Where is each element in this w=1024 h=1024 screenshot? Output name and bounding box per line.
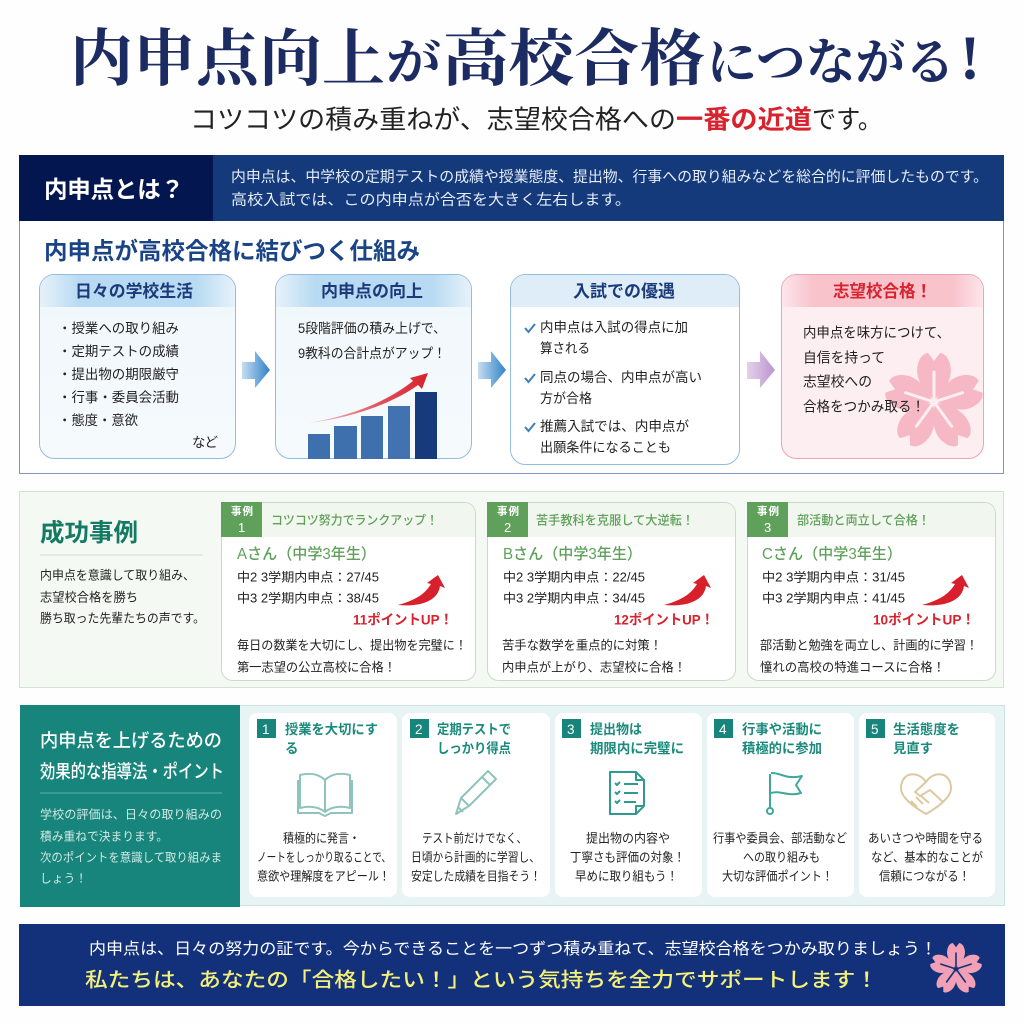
header label block: 内申点とは？ bbox=[44, 176, 184, 202]
point 1 bbox=[249, 713, 397, 897]
card: entrance exam advantage: 同点の場合、内申点が高い bbox=[540, 369, 702, 385]
point 1: 1 bbox=[262, 722, 270, 737]
icon: checklist document bbox=[610, 772, 644, 814]
case 2: Bさん（中学3年生） bbox=[503, 545, 642, 563]
point 5: あいさつや時間を守る bbox=[868, 832, 983, 846]
case 1: 中3 2学期内申点：38/45 bbox=[237, 590, 379, 606]
card: passing the target school: 自信を持って bbox=[803, 350, 885, 366]
case 2: 事例 bbox=[497, 504, 519, 518]
point 3: 丁寧さも評価の対象！ bbox=[570, 850, 685, 864]
closing banner: 私たちは、あなたの「合格したい！」という気持ちを全力でサポートします！ bbox=[85, 968, 878, 992]
point 2: 安定した成績を目指そう！ bbox=[411, 870, 541, 884]
title: につながる bbox=[707, 22, 955, 94]
icon: book bbox=[298, 774, 352, 816]
card: entrance exam advantage: 算される bbox=[540, 341, 590, 356]
icon: cherry blossom bbox=[929, 943, 983, 995]
case 1: 第一志望の公立高校に合格！ bbox=[237, 660, 396, 674]
card: passing the target school: 内申点を味方につけて、 bbox=[803, 324, 950, 342]
card: naishinten improvement: 5段階評価の積み上げで、 bbox=[298, 321, 446, 336]
case 3: 中2 3学期内申点：31/45 bbox=[762, 570, 905, 584]
section heading: 内申点が高校合格に結びつく仕組み bbox=[44, 237, 420, 264]
case 1 bbox=[221, 502, 476, 680]
card: entrance exam advantage bbox=[510, 274, 740, 464]
left teal intro: 積み重ねで決まります。 bbox=[40, 828, 168, 844]
case 1: コツコツ努力でランクアップ！ bbox=[271, 514, 438, 528]
card: passing the target school bbox=[782, 274, 986, 458]
card: daily school life: 日々の学校生活 bbox=[75, 281, 193, 301]
card: entrance exam advantage: 内申点は入試の得点に加 bbox=[540, 319, 688, 335]
definition text bbox=[231, 168, 988, 208]
point 3: 提出物は bbox=[590, 721, 642, 737]
arrow bbox=[478, 351, 506, 388]
point 1: る bbox=[285, 741, 298, 756]
case 1: 11ポイントUP！ bbox=[353, 612, 453, 628]
header label block bbox=[19, 155, 213, 221]
arrow bbox=[242, 351, 270, 388]
card: daily school life: ・態度・意欲 bbox=[58, 413, 139, 428]
case 1: 事例 bbox=[231, 504, 253, 518]
subtitle: コツコツの積み重ねが、志望校合格への bbox=[190, 104, 676, 134]
title: 内申点向上 bbox=[70, 9, 385, 98]
closing banner bbox=[19, 924, 1005, 1006]
card: passing the target school: 志望校への bbox=[803, 374, 872, 390]
case 2: 苦手教科を克服して大逆転！ bbox=[536, 512, 694, 528]
point 4: 行事や委員会、部活動など bbox=[713, 832, 847, 846]
title: ! bbox=[960, 24, 980, 92]
panel: effective points bbox=[20, 705, 1004, 907]
case 3: 事例 bbox=[757, 504, 779, 518]
left teal intro: 学校の評価は、日々の取り組みの bbox=[40, 806, 222, 822]
point 2: しっかり得点 bbox=[437, 741, 511, 756]
case 1: 毎日の数業を大切にし、提出物を完璧に！ bbox=[237, 638, 467, 652]
left teal intro: しょう！ bbox=[40, 872, 87, 886]
header band bbox=[19, 155, 1004, 221]
success intro: 内申点を意識して取り組み、 bbox=[40, 568, 195, 582]
point 1: ノートをしっかり取ることで、 bbox=[257, 850, 391, 864]
subtitle bbox=[190, 104, 882, 134]
card: entrance exam advantage: 入試での優遇 bbox=[573, 282, 675, 301]
title bbox=[70, 9, 980, 98]
point 5: 信頼につながる！ bbox=[879, 868, 970, 884]
success intro: 勝ち取った先輩たちの声です。 bbox=[40, 612, 205, 626]
case 2: 中2 3学期内申点：22/45 bbox=[503, 570, 645, 584]
point 4 bbox=[707, 713, 854, 897]
case 1: 1 bbox=[238, 520, 245, 535]
point 3: 早めに取り組もう！ bbox=[575, 870, 678, 884]
definition text: 内申点は、中学校の定期テストの成績や授業態度、提出物、行事への取り組みなどを総合的に評価したものです。 bbox=[231, 168, 988, 186]
point 5: 5 bbox=[871, 722, 879, 737]
point 2: 日頃から計画的に学習し、 bbox=[411, 850, 540, 864]
card: passing the target school: 合格をつかみ取る！ bbox=[803, 398, 925, 416]
point 4: 積極的に参加 bbox=[742, 740, 822, 756]
title: 高校合格 bbox=[443, 9, 705, 98]
bar chart bbox=[308, 392, 437, 459]
definition text: 高校入試では、この内申点が合否を大きく左右します。 bbox=[231, 192, 631, 208]
card: naishinten improvement: 9教科の合計点がアップ！ bbox=[298, 346, 446, 361]
point 3: 提出物の内容や bbox=[586, 830, 670, 846]
left teal intro: 効果的な指導法・ポイント bbox=[40, 761, 224, 782]
point 2: 2 bbox=[415, 722, 423, 737]
point 5: 生活態度を bbox=[893, 721, 960, 737]
case 2: 苦手な数学を重点的に対策！ bbox=[502, 638, 662, 652]
case 3 bbox=[747, 502, 996, 680]
case 2: 2 bbox=[504, 520, 511, 535]
case 3: 10ポイントUP！ bbox=[873, 612, 975, 628]
point 5: など、基本的なことが bbox=[871, 850, 983, 864]
case 2: 内申点が上がり、志望校に合格！ bbox=[502, 660, 686, 674]
left teal intro: 次のポイントを意識して取り組みま bbox=[40, 850, 222, 864]
card: naishinten improvement: 内申点の向上 bbox=[321, 281, 423, 301]
card: entrance exam advantage: 出願条件になることも bbox=[540, 439, 671, 455]
case 2: 中3 2学期内申点：34/45 bbox=[503, 590, 645, 606]
subtitle: 一番の近道 bbox=[676, 104, 812, 134]
point 5: 見直す bbox=[893, 741, 933, 756]
point 5 bbox=[859, 713, 995, 897]
card: daily school life: など bbox=[192, 435, 218, 450]
success intro bbox=[40, 568, 205, 626]
case 3: 中3 2学期内申点：41/45 bbox=[762, 590, 905, 606]
card: entrance exam advantage: 推薦入試では、内申点が bbox=[540, 419, 690, 434]
card: daily school life: ・提出物の期限厳守 bbox=[58, 367, 179, 382]
success heading: 成功事例 bbox=[40, 519, 138, 547]
point 4: 行事や活動に bbox=[742, 721, 822, 737]
panel: success stories bbox=[20, 492, 1004, 688]
point 2: テスト前だけでなく、 bbox=[422, 830, 527, 846]
case 2: 12ポイントUP！ bbox=[614, 612, 714, 628]
case 2 bbox=[487, 502, 736, 680]
case 3: 3 bbox=[764, 520, 771, 535]
case 1: 中2 3学期内申点：27/45 bbox=[237, 570, 379, 584]
card: daily school life: ・行事・委員会活動 bbox=[58, 390, 179, 405]
case 3: Cさん（中学3年生） bbox=[762, 545, 902, 563]
title: が bbox=[386, 22, 441, 94]
card: daily school life: ・授業への取り組み bbox=[58, 321, 179, 336]
closing banner: 内申点は、日々の努力の証です。今からできることを一つずつ積み重ねて、志望校合格をつかみ取りましょう！ bbox=[89, 940, 937, 958]
icon: pencil bbox=[456, 771, 496, 814]
icon: cherry blossom bbox=[882, 353, 986, 452]
card: naishinten improvement bbox=[276, 274, 472, 459]
card: daily school life: ・定期テストの成績 bbox=[58, 344, 179, 359]
success intro: 志望校合格を勝ち bbox=[40, 590, 138, 604]
point 3: 期限内に完璧に bbox=[590, 740, 684, 756]
point 2: 定期テストで bbox=[437, 722, 511, 737]
point 4: 大切な評価ポイント！ bbox=[722, 870, 833, 884]
point 1: 授業を大切にす bbox=[285, 721, 378, 737]
case 3: 部活動と勉強を両立し、計画的に学習！ bbox=[760, 638, 978, 652]
case 3: 憧れの高校の特進コースに合格！ bbox=[760, 660, 945, 674]
point 3: 3 bbox=[567, 722, 575, 737]
point 4: への取り組みも bbox=[743, 850, 820, 864]
icon: handshake heart bbox=[901, 774, 951, 814]
card: entrance exam advantage: 方が合格 bbox=[540, 391, 593, 406]
point 2 bbox=[402, 713, 550, 897]
point 4: 4 bbox=[719, 722, 727, 737]
panel: what is naishinten bbox=[19, 155, 1004, 474]
case 3: 部活動と両立して合格！ bbox=[797, 514, 930, 528]
left teal intro bbox=[20, 705, 240, 907]
icon: flag bbox=[767, 773, 802, 814]
arrow bbox=[747, 351, 775, 388]
left teal intro: 内申点を上げるための bbox=[40, 730, 222, 751]
card: passing the target school: 志望校合格！ bbox=[833, 282, 932, 301]
point 1: 積極的に発言・ bbox=[283, 830, 360, 846]
card: daily school life bbox=[40, 274, 236, 458]
icon: rising red arrow bbox=[308, 373, 428, 423]
subtitle: です。 bbox=[812, 104, 882, 134]
point 3 bbox=[555, 713, 702, 897]
case 1: Aさん（中学3年生） bbox=[237, 545, 376, 563]
point 1: 意欲や理解度をアピール！ bbox=[257, 868, 390, 884]
